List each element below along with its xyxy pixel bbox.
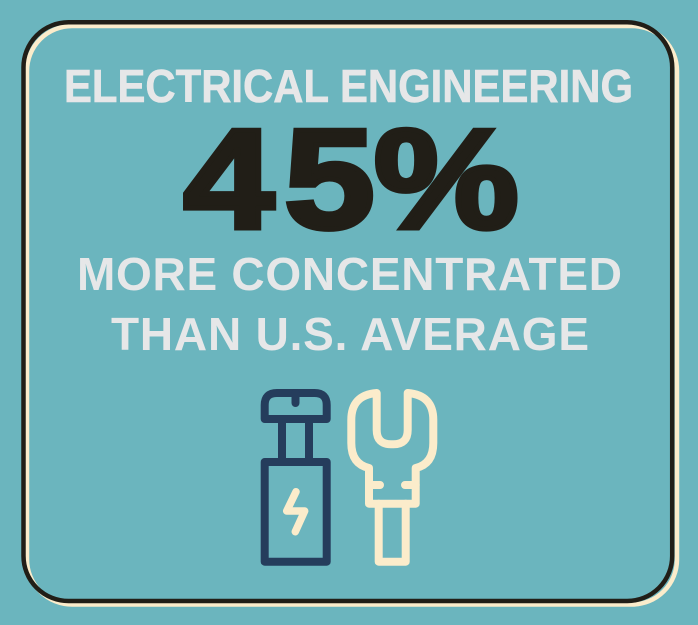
icon: screwdriver with battery handle	[265, 393, 327, 562]
icon: wrench	[351, 393, 433, 562]
heading: electrical engineering: ELECTRICAL ENGINEERING	[64, 60, 633, 112]
text: more concentrated: MORE CONCENTRATED	[77, 248, 622, 300]
icon: lightning bolt	[287, 492, 305, 532]
big number: 45%: 45%	[183, 100, 519, 259]
text: than U.S. average: THAN U.S. AVERAGE	[111, 308, 589, 360]
